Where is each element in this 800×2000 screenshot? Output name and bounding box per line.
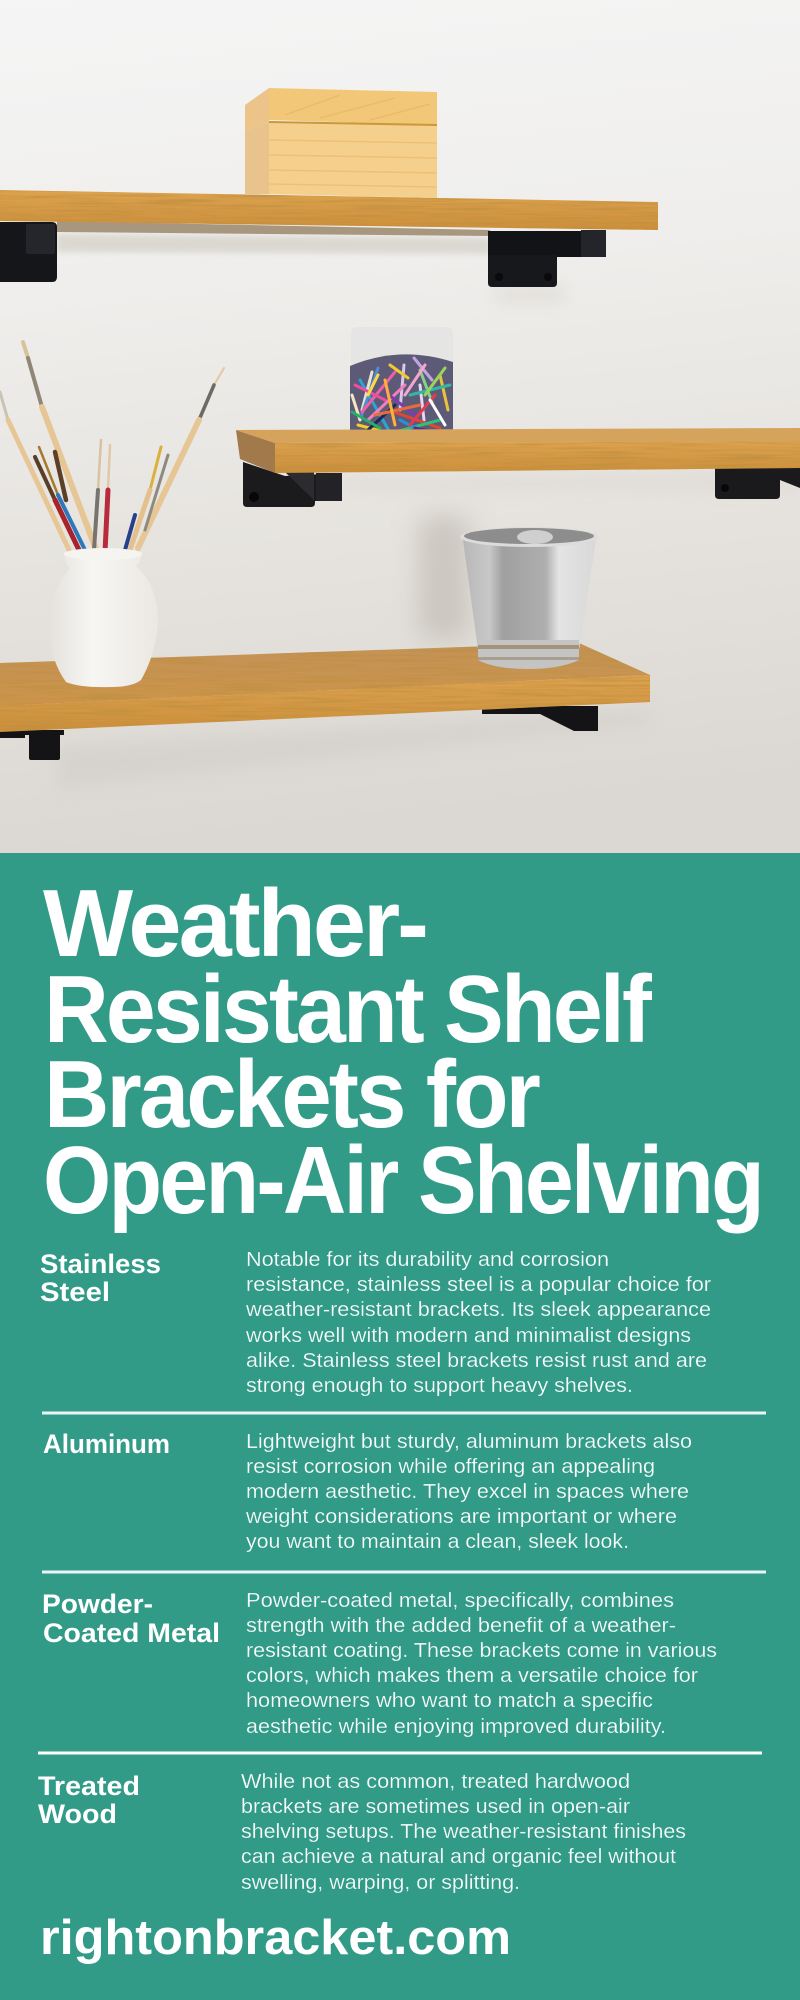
right bracket [482,706,598,731]
wooden box [245,88,437,198]
wall shadows [57,234,800,790]
body: powder-coated metal: Powder-coated metal, specifically, combines [246,1590,674,1612]
body: powder-coated metal: homeowners who want to match a specific [246,1690,653,1712]
heading: powder-coated metal: Powder- [42,1589,153,1619]
section: treated wood [38,1771,686,1894]
heading: stainless steel: Stainless [40,1249,161,1279]
wall background [0,0,800,853]
body: powder-coated metal: colors, which makes them a versatile choice for [246,1665,698,1687]
title: Resistant Shelf [44,956,653,1063]
title: Brackets for [44,1041,540,1148]
heading: stainless steel [40,1249,161,1307]
body: stainless steel: Notable for its durability and corrosion [246,1249,609,1271]
heading: powder-coated metal [42,1589,220,1648]
title: Weather- [43,870,426,977]
heading: powder-coated metal: Coated Metal [43,1618,220,1648]
heading: treated wood [38,1771,140,1829]
paper clip jar [350,327,453,438]
title [43,870,762,1234]
section: stainless steel [40,1249,711,1397]
body: treated wood: swelling, warping, or splitting. [241,1872,520,1894]
galvanized metal bucket [460,527,598,669]
section: aluminum [43,1429,692,1553]
body: stainless steel: weather-resistant brackets. Its sleek appearance [245,1299,711,1321]
body: treated wood [241,1771,686,1894]
body: powder-coated metal: aesthetic while enjoying improved durability. [246,1716,666,1738]
body: stainless steel: resistance, stainless steel is a popular choice for [246,1274,711,1296]
right bracket [715,468,800,499]
left bracket [0,730,64,760]
white vase [48,548,158,687]
middle shelf with brackets [236,428,800,507]
body: aluminum: Lightweight but sturdy, aluminum brackets also [246,1431,692,1453]
body: aluminum: you want to maintain a clean, sleek look. [246,1531,629,1553]
shelf plank [0,190,658,230]
panel: text content on teal background [38,870,766,1965]
body: treated wood: can achieve a natural and organic feel without [241,1846,676,1868]
body: treated wood: brackets are sometimes used in open-air [241,1796,630,1818]
right bracket [488,230,606,287]
body: powder-coated metal: strength with the added benefit of a weather- [246,1615,676,1637]
photo: wall shelves with objects [0,0,800,853]
body: aluminum: modern aesthetic. They excel in spaces where [246,1481,689,1503]
heading: treated wood: Treated [38,1771,140,1801]
body: powder-coated metal [246,1590,717,1738]
body: stainless steel: alike. Stainless steel brackets resist rust and are [246,1350,707,1372]
body: stainless steel: works well with modern and minimalist designs [245,1325,691,1347]
left bracket [243,462,342,507]
heading: treated wood: Wood [38,1799,117,1829]
body: stainless steel [245,1249,711,1397]
bottom shelf with brackets [0,643,650,760]
paintbrushes [0,342,224,552]
body: aluminum: weight considerations are important or where [245,1506,677,1528]
body: stainless steel: strong enough to support heavy shelves. [246,1375,633,1397]
body: treated wood: shelving setups. The weather-resistant finishes [241,1821,686,1843]
website footer: rightonbracket.com [40,1911,511,1965]
body: treated wood: While not as common, treated hardwood [241,1771,630,1793]
end grain [236,430,275,473]
top shelf with brackets [0,190,658,287]
body: powder-coated metal: resistant coating. These brackets come in various [246,1640,717,1662]
heading: stainless steel: Steel [40,1277,110,1307]
body: aluminum: resist corrosion while offering an appealing [246,1456,655,1478]
heading: aluminum: Aluminum [43,1429,170,1459]
left bracket [0,222,57,282]
body: aluminum [245,1431,692,1553]
section: powder-coated metal [42,1589,717,1738]
